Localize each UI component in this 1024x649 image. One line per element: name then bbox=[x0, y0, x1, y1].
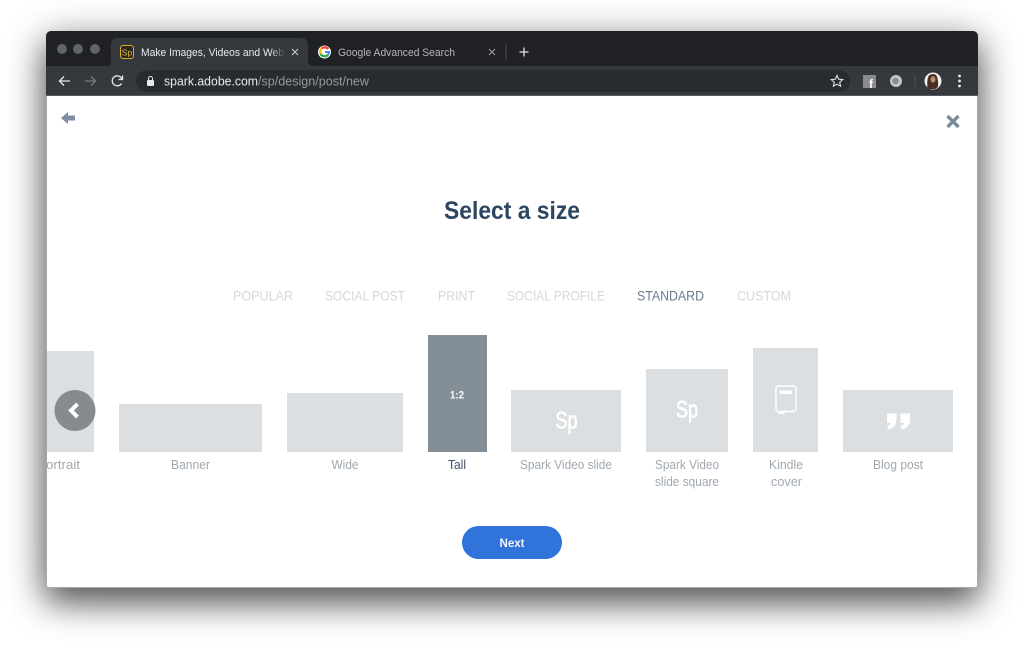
card: portrait bbox=[47, 351, 94, 469]
icon: facebook extension bbox=[863, 75, 876, 88]
category tabs: POPULAR bbox=[233, 288, 293, 304]
icon: facebook extension: f bbox=[869, 77, 874, 91]
icon: forward bbox=[85, 76, 96, 86]
icon: google favicon bbox=[318, 46, 331, 58]
card: portrait: ortrait bbox=[46, 458, 81, 472]
toolbar bbox=[46, 66, 978, 96]
card: blog post bbox=[843, 390, 953, 472]
icon: close tab bbox=[292, 49, 298, 55]
card: banner: Banner bbox=[171, 458, 210, 472]
card: spark video slide square: slide square bbox=[655, 475, 719, 489]
title: Select a size bbox=[444, 197, 580, 225]
card: kindle cover: Kindle bbox=[769, 458, 803, 472]
icon: new tab bbox=[520, 48, 528, 56]
card: kindle cover: cover bbox=[771, 475, 802, 489]
category tabs bbox=[234, 291, 790, 300]
next button: Next bbox=[500, 538, 525, 550]
card: spark video slide square: Spark Video bbox=[655, 458, 719, 472]
category tabs: STANDARD bbox=[637, 288, 704, 304]
icon: avatar bbox=[924, 72, 942, 90]
browser window bbox=[46, 31, 978, 588]
card: wide: Wide bbox=[332, 458, 359, 472]
tab strip bbox=[46, 31, 978, 66]
card: kindle cover bbox=[753, 348, 818, 489]
category tabs: CUSTOM bbox=[737, 288, 791, 304]
icon: page close bbox=[948, 116, 958, 127]
window controls bbox=[57, 44, 100, 54]
category tabs: SOCIAL PROFILE bbox=[507, 288, 605, 304]
tab title: Google Advanced Search bbox=[338, 47, 455, 59]
icon: page back arrow bbox=[61, 112, 75, 124]
icon: spark favicon bbox=[120, 46, 134, 58]
category tabs: SOCIAL POST bbox=[325, 288, 405, 304]
address bar: /sp/design/post/new bbox=[258, 74, 370, 88]
card: tall selected: Tall bbox=[448, 458, 466, 472]
category tabs: PRINT bbox=[438, 288, 475, 304]
active tab bbox=[107, 38, 313, 66]
address bar bbox=[136, 70, 850, 92]
icon: lock bbox=[147, 76, 154, 86]
card: blog post: Blog post bbox=[873, 458, 923, 472]
icon: book bbox=[776, 386, 796, 415]
icon: back bbox=[60, 76, 70, 86]
icon: star bbox=[831, 76, 843, 86]
card: spark video slide square bbox=[646, 369, 728, 489]
icon: spark favicon: Sp bbox=[122, 48, 132, 58]
card: tall selected bbox=[428, 335, 487, 472]
tab title: Make Images, Videos and Web bbox=[141, 47, 284, 59]
card: banner bbox=[119, 404, 262, 472]
window shadow bbox=[46, 31, 978, 588]
inactive tab bbox=[318, 46, 495, 59]
card: tall selected: 1:2 bbox=[450, 390, 464, 402]
icon: record extension bbox=[890, 75, 902, 87]
card: spark video slide bbox=[511, 390, 621, 472]
icon: menu bbox=[958, 75, 961, 87]
icon: close tab bbox=[489, 49, 495, 55]
card: spark video slide: Sp bbox=[556, 408, 578, 434]
icon: quotes bbox=[887, 414, 910, 430]
icon: reload bbox=[112, 76, 122, 86]
card: spark video slide square: Sp bbox=[676, 396, 698, 424]
card: wide bbox=[287, 393, 403, 472]
carousel previous button bbox=[54, 390, 96, 431]
card: spark video slide: Spark Video slide bbox=[520, 458, 612, 472]
url: spark.adobe.com bbox=[164, 74, 258, 88]
next button bbox=[462, 526, 562, 559]
